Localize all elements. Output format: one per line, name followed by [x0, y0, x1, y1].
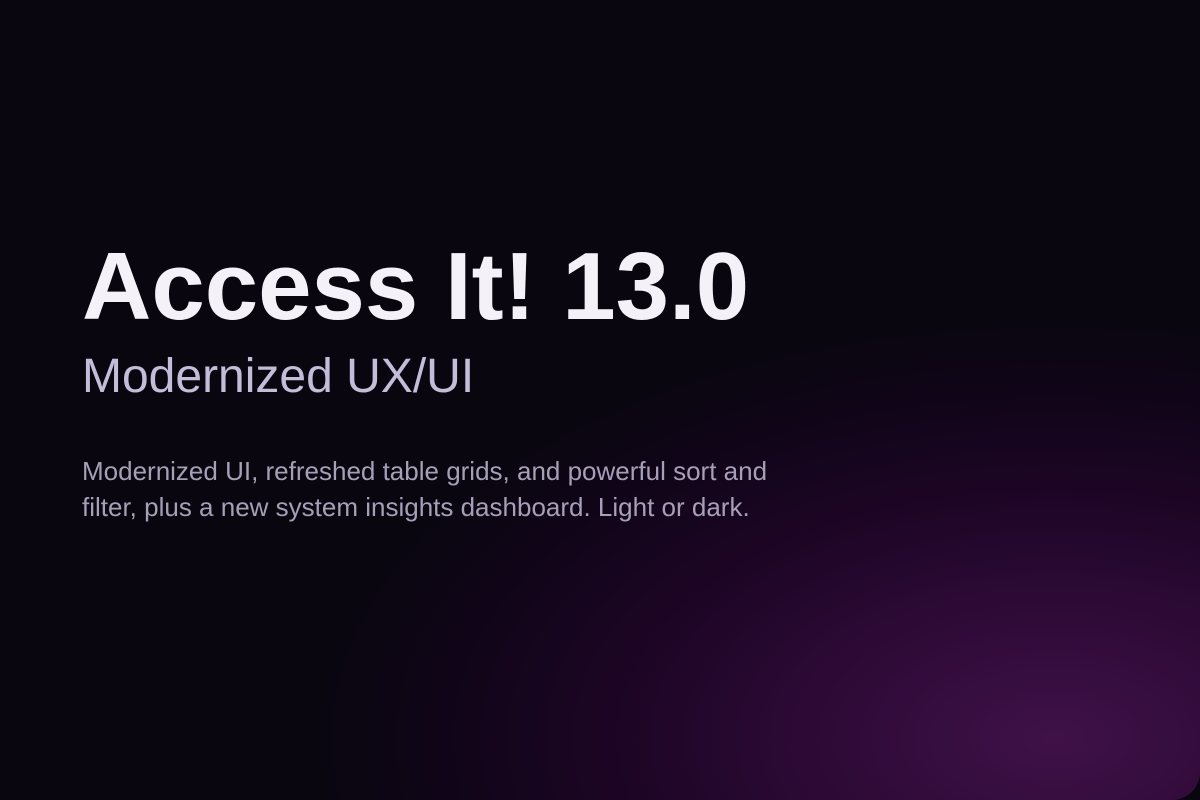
description text: filter, plus a new system insights dashboard. Light or dark. — [82, 492, 750, 522]
description text: Modernized UI, refreshed table grids, and powerful sort and — [82, 456, 767, 486]
description text — [82, 456, 767, 522]
title: Access It! 13.0 — [82, 233, 749, 340]
subtitle: Modernized UX/UI — [82, 350, 474, 403]
